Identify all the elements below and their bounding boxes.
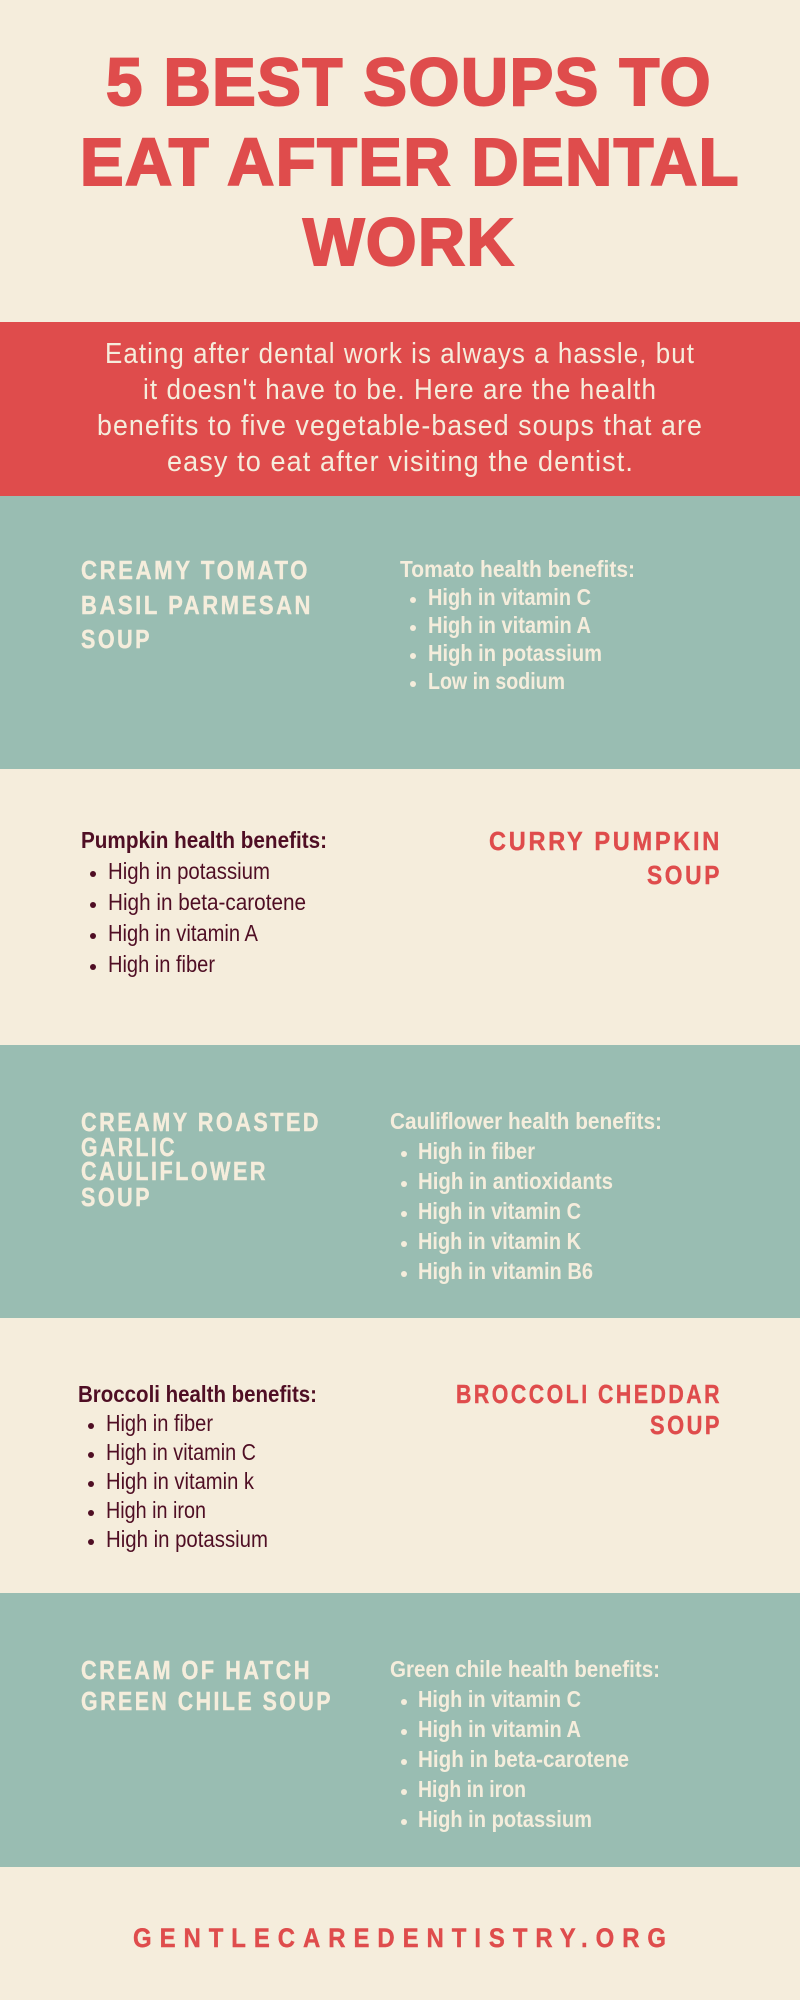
benefits list: broccoli: High in potassium xyxy=(106,1526,268,1552)
benefits list: green chile: High in potassium xyxy=(418,1806,592,1832)
soup name: creamy roasted garlic cauliflower xyxy=(81,1107,321,1212)
soup name: creamy roasted garlic cauliflower: SOUP xyxy=(81,1182,152,1212)
panel: cauliflower soup xyxy=(0,1045,800,1318)
intro text xyxy=(97,338,703,478)
soup name: curry pumpkin xyxy=(489,826,722,890)
benefits list: cauliflower: High in vitamin K xyxy=(418,1228,581,1254)
benefits heading: broccoli: Broccoli health benefits: xyxy=(78,1381,317,1407)
benefits list: tomato: Low in sodium xyxy=(428,668,565,694)
benefits list: tomato: High in vitamin A xyxy=(428,612,591,638)
panel: broccoli soup xyxy=(0,1318,800,1593)
benefits list: green chile: High in vitamin A xyxy=(418,1716,581,1742)
benefits list: green chile: High in iron xyxy=(418,1776,526,1802)
intro text: easy to eat after visiting the dentist. xyxy=(167,446,634,478)
panel: green chile soup xyxy=(0,1593,800,1867)
soup name: creamy tomato basil parmesan: CREAMY TOMATO xyxy=(81,555,310,585)
title: WORK xyxy=(303,205,515,280)
benefits list: cauliflower: High in vitamin C xyxy=(418,1198,581,1224)
benefits list: pumpkin: High in fiber xyxy=(108,951,215,977)
soup name: curry pumpkin: CURRY PUMPKIN xyxy=(489,826,722,856)
benefits list: broccoli xyxy=(88,1410,268,1552)
intro text: benefits to five vegetable-based soups that are xyxy=(97,410,703,442)
title: 5 BEST SOUPS TO xyxy=(106,45,712,120)
benefits heading: pumpkin: Pumpkin health benefits: xyxy=(81,827,327,853)
soup name: creamy tomato basil parmesan: BASIL PARMESAN xyxy=(81,590,313,620)
benefits list: pumpkin: High in beta-carotene xyxy=(108,889,306,915)
benefits list: green chile: High in beta-carotene xyxy=(418,1746,629,1772)
benefits list: tomato: High in vitamin C xyxy=(428,584,591,610)
benefits list: pumpkin xyxy=(90,858,306,977)
panel: tomato soup xyxy=(0,496,800,769)
intro text: Eating after dental work is always a hassle, but xyxy=(105,338,695,370)
benefits list: green chile: High in vitamin C xyxy=(418,1686,581,1712)
benefits heading: tomato: Tomato health benefits: xyxy=(400,556,635,582)
benefits list: cauliflower: High in antioxidants xyxy=(418,1168,613,1194)
soup name: creamy roasted garlic cauliflower: GARLIC xyxy=(81,1132,177,1162)
footer website: GENTLECAREDENTISTRY.ORG xyxy=(133,1923,674,1953)
soup name: curry pumpkin: SOUP xyxy=(647,860,722,890)
benefits heading: cauliflower: Cauliflower health benefits: xyxy=(390,1108,662,1134)
benefits list: green chile xyxy=(401,1686,629,1832)
benefits list: tomato xyxy=(410,584,602,694)
title xyxy=(80,45,740,280)
benefits list: broccoli: High in iron xyxy=(106,1497,206,1523)
soup name: broccoli cheddar: SOUP xyxy=(650,1410,722,1440)
intro text: it doesn't have to be. Here are the health xyxy=(143,374,657,406)
soup name: cream of hatch green chile xyxy=(81,1655,333,1716)
title: EAT AFTER DENTAL xyxy=(80,125,740,200)
panel: pumpkin soup xyxy=(0,769,800,1045)
soup name: broccoli cheddar: BROCCOLI CHEDDAR xyxy=(456,1379,722,1409)
soup name: creamy tomato basil parmesan: SOUP xyxy=(81,624,152,654)
soup name: creamy tomato basil parmesan xyxy=(81,555,313,654)
benefits heading: green chile: Green chile health benefits: xyxy=(390,1656,660,1682)
panel: introduction xyxy=(0,322,800,496)
soup name: cream of hatch green chile: CREAM OF HATCH xyxy=(81,1655,312,1685)
benefits list: tomato: High in potassium xyxy=(428,640,602,666)
benefits list: cauliflower: High in fiber xyxy=(418,1138,535,1164)
benefits list: broccoli: High in fiber xyxy=(106,1410,213,1436)
soup name: creamy roasted garlic cauliflower: CAULIFLOWER xyxy=(81,1156,268,1186)
soup name: creamy roasted garlic cauliflower: CREAMY ROASTED xyxy=(81,1107,321,1137)
benefits list: broccoli: High in vitamin C xyxy=(106,1439,256,1465)
benefits list: cauliflower xyxy=(401,1138,613,1284)
soup name: cream of hatch green chile: GREEN CHILE SOUP xyxy=(81,1686,333,1716)
benefits list: broccoli: High in vitamin k xyxy=(106,1468,254,1494)
benefits list: pumpkin: High in potassium xyxy=(108,858,270,884)
soup name: broccoli cheddar xyxy=(456,1379,722,1440)
benefits list: cauliflower: High in vitamin B6 xyxy=(418,1258,593,1284)
benefits list: pumpkin: High in vitamin A xyxy=(108,920,258,946)
